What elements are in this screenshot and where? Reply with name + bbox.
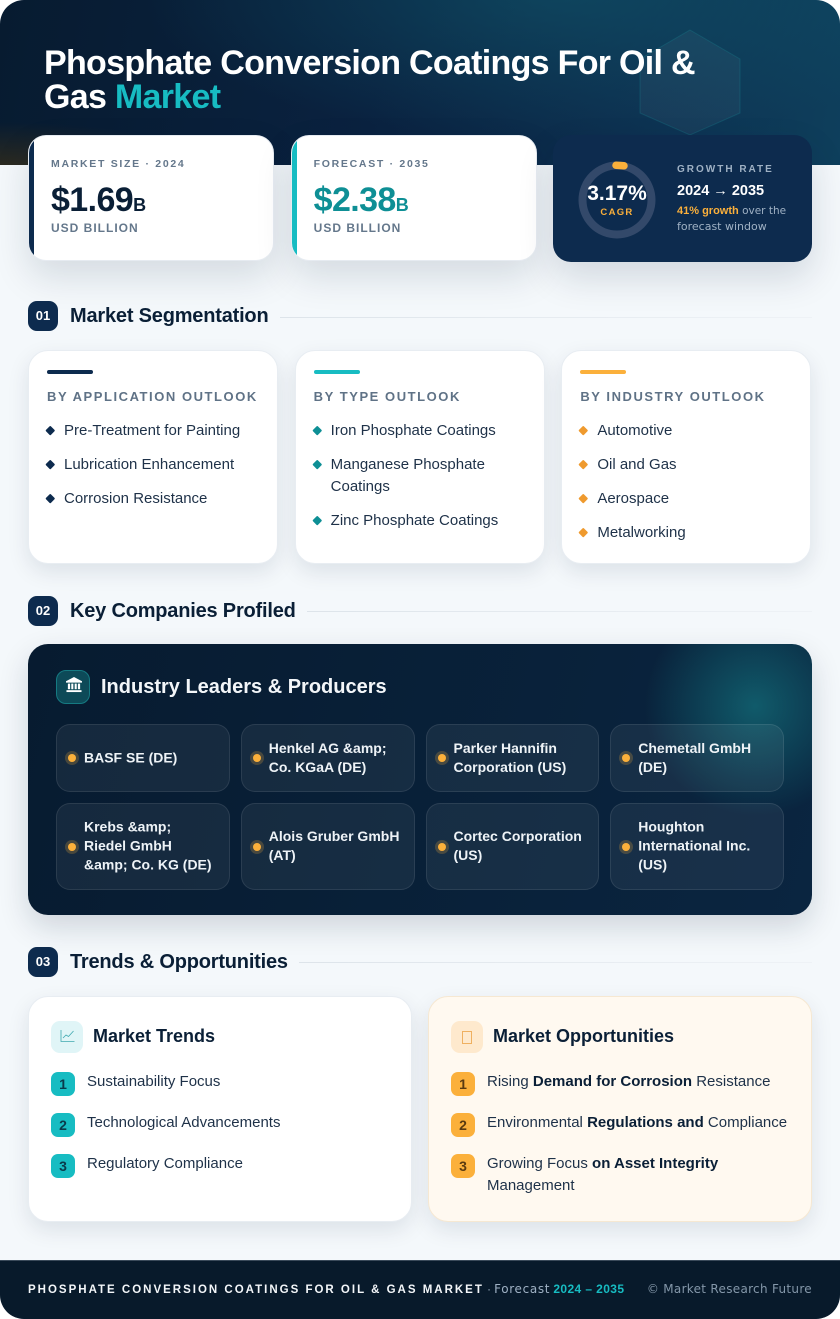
panel: by application: Pre-Treatment for Painting [64, 422, 240, 439]
KPI card: growth rate: forecast window [677, 220, 767, 233]
panel: market trends: 1 [59, 1076, 67, 1092]
KPI card: growth rate: 41% growth over the [677, 205, 786, 217]
panel: market trends: 3 [59, 1158, 67, 1174]
KPI card: forecast: $2.38B [314, 181, 409, 219]
panel: market trends [28, 996, 412, 1222]
company: Houghton: International Inc. [638, 837, 750, 853]
icon: missing glyph box [451, 1021, 483, 1053]
company: Chemetall [610, 724, 784, 792]
KPI card: forecast: FORECAST · 2035 [314, 158, 430, 170]
panel: industry leaders [28, 644, 812, 915]
KPI card: market size: $1.69B [51, 181, 146, 219]
panel: by type: Coatings [331, 478, 390, 495]
company: Alois Gruber: (AT) [269, 846, 296, 862]
section heading 01: Market Segmentation [70, 305, 268, 327]
section heading 03: Trends & Opportunities [70, 951, 288, 973]
company: Cortec: Cortec Corporation [454, 828, 582, 844]
panel: by industry: Metalworking [597, 524, 686, 541]
company: Krebs: Riedel GmbH [84, 837, 172, 853]
company: Alois Gruber: Alois Gruber GmbH [269, 828, 399, 844]
panel: market opportunities [428, 996, 812, 1222]
panel: by industry: Aerospace [597, 490, 669, 507]
panel: market opportunities: 2 [459, 1117, 467, 1133]
company: Parker Hannifin: Corporation (US) [454, 758, 566, 774]
panel: market opportunities: Management [487, 1177, 575, 1194]
title: Phosphate Conversion Coatings For Oil & [44, 44, 695, 82]
KPI card: growth rate: GROWTH RATE [677, 164, 774, 175]
company: Cortec: (US) [454, 846, 482, 862]
section heading 01: 01 [36, 308, 50, 323]
panel: market opportunities: 1 [459, 1076, 467, 1092]
company: Houghton: (US) [638, 856, 667, 872]
panel: by industry: Oil and Gas [597, 456, 677, 473]
company: Henkel [241, 724, 414, 792]
KPI card: forecast [291, 135, 537, 261]
CAGR donut [578, 162, 656, 238]
CAGR donut: CAGR [600, 207, 634, 218]
panel: by application: Lubrication Enhancement [64, 456, 234, 473]
section heading 03 [28, 947, 748, 977]
panel: market trends: Sustainability Focus [87, 1073, 220, 1090]
panel: market opportunities: Growing Focus on Asset Integrity [487, 1155, 718, 1172]
panel: industry leaders: Industry Leaders & Producers [101, 676, 387, 698]
panel: market opportunities: Environmental Regulations and Compliance [487, 1114, 787, 1131]
company: Krebs [56, 803, 230, 890]
panel: market trends: Regulatory Compliance [87, 1155, 243, 1172]
icon: institution [56, 670, 90, 704]
company: Henkel: Henkel AG &amp; [269, 740, 386, 756]
panel: market trends: 2 [59, 1117, 67, 1133]
section heading 02: Key Companies Profiled [70, 600, 296, 622]
panel: market opportunities: Rising Demand for Corrosion Resistance [487, 1073, 770, 1090]
panel: by industry: Automotive [597, 422, 672, 439]
panel: by type: Iron Phosphate Coatings [331, 422, 496, 439]
panel: market opportunities: 3 [459, 1158, 467, 1174]
panel: by application: BY APPLICATION OUTLOOK [47, 389, 258, 404]
panel: by application [28, 350, 278, 564]
company: Parker Hannifin: Parker Hannifin [454, 740, 557, 756]
panel: by type [295, 350, 545, 564]
CAGR donut: 3.17% [587, 182, 647, 205]
panel: by industry: BY INDUSTRY OUTLOOK [580, 389, 766, 404]
company: BASF: BASF SE (DE) [84, 749, 177, 765]
company: Cortec [426, 803, 599, 890]
panel: market opportunities: Market Opportunities [493, 1026, 674, 1046]
company: Henkel: Co. KGaA (DE) [269, 758, 366, 774]
footer: © Market Research Future [647, 1282, 812, 1296]
KPI card: growth rate: 2024 → 2035 [677, 183, 764, 199]
panel: by type: Zinc Phosphate Coatings [331, 512, 498, 529]
company: Krebs: Krebs &amp; [84, 818, 171, 834]
company: Chemetall: Chemetall GmbH [638, 740, 751, 756]
panel: by industry [561, 350, 811, 564]
icon: chart [51, 1021, 83, 1053]
panel: market trends: Market Trends [93, 1026, 215, 1046]
company: Chemetall: (DE) [638, 758, 667, 774]
panel: by type: BY TYPE OUTLOOK [314, 389, 461, 404]
title [44, 44, 695, 116]
company: Houghton: Houghton [638, 818, 704, 834]
company: Alois Gruber [241, 803, 414, 890]
panel: market trends: Technological Advancements [87, 1114, 280, 1131]
section heading 02 [28, 596, 748, 626]
company: Krebs: &amp; Co. KG (DE) [84, 856, 212, 872]
footer [0, 1260, 840, 1319]
hero banner [0, 0, 840, 165]
section heading 03: 03 [36, 954, 50, 969]
KPI card: forecast: USD BILLION [314, 221, 401, 235]
title: Gas Market [44, 78, 220, 116]
company: BASF [56, 724, 230, 792]
company: Houghton [610, 803, 784, 890]
panel: by application: Corrosion Resistance [64, 490, 207, 507]
KPI card: market size: MARKET SIZE · 2024 [51, 158, 185, 170]
panel: by type: Manganese Phosphate [331, 456, 485, 473]
KPI card: market size [28, 135, 274, 261]
KPI card: growth rate [553, 135, 812, 262]
section heading 01 [28, 301, 746, 331]
company: Parker Hannifin [426, 724, 599, 792]
footer: PHOSPHATE CONVERSION COATINGS FOR OIL & GAS MARKET · Forecast 2024 – 2035 [28, 1282, 624, 1296]
KPI card: market size: USD BILLION [51, 221, 139, 235]
hexagon decoration [640, 30, 740, 135]
section heading 02: 02 [36, 603, 50, 618]
